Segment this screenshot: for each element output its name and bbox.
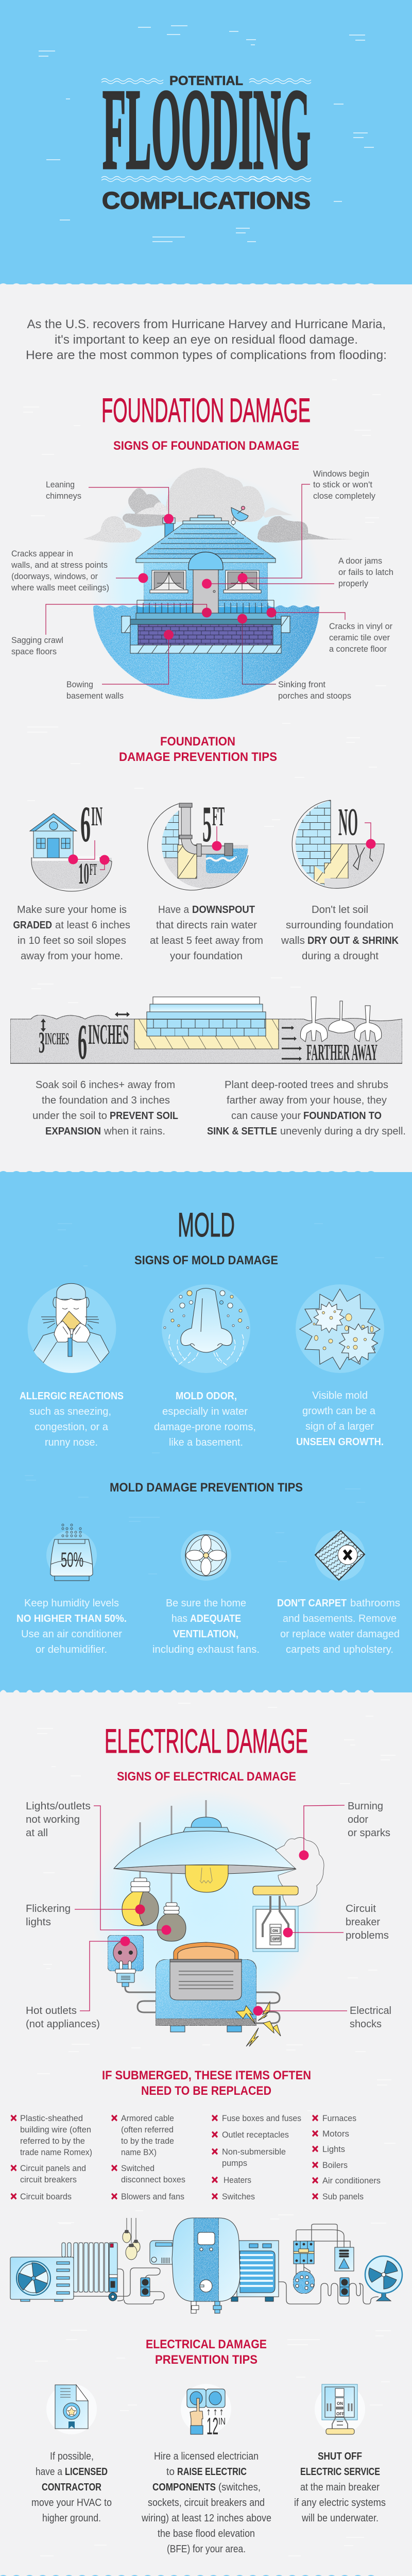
cords: [140, 1800, 206, 1903]
callout: flickering lights: lights: [26, 1917, 51, 1928]
tree roots: [300, 997, 382, 1042]
callout: flickering lights: Flickering: [26, 1903, 71, 1914]
flickering bulb: [122, 1878, 159, 1926]
text: shut off: ELECTRIC SERVICE: [300, 2466, 380, 2478]
icon: raised outlets: [181, 2384, 231, 2439]
text: allergic reactions: runny nose.: [45, 1437, 98, 1448]
list column 1: building wire (often: [20, 2125, 91, 2134]
tip text: graded: [13, 904, 130, 962]
heading: if submerged: NEED TO BE REPLACED: [141, 2084, 271, 2098]
list column 1: trade name Romex): [20, 2147, 92, 2157]
toaster: [156, 1942, 256, 2032]
callout: bowing walls: Bowing: [66, 680, 93, 689]
list column 2: Armored cable: [121, 2113, 174, 2123]
text: carpet: [277, 1598, 400, 1655]
list column 4: Air conditioners: [322, 2176, 381, 2185]
text: contractor: [31, 2451, 112, 2524]
text: shut off: SHUT OFF: [318, 2451, 362, 2462]
electrical diagram: ON: [272, 1929, 278, 1933]
list column 4: Furnaces: [322, 2113, 356, 2123]
callout: leaning chimneys: chimneys: [46, 491, 81, 501]
intro text: [26, 317, 387, 362]
icon: dehumidifier: 50%: [61, 1549, 83, 1571]
heading: mold prevention tips: MOLD DAMAGE PREVENTION TIPS: [110, 1481, 303, 1495]
hero title: [101, 65, 311, 214]
text: ventilation: VENTILATION,: [173, 1629, 238, 1640]
porch railing: [137, 600, 274, 613]
house diagram: [83, 468, 353, 703]
callout: cracks in walls: (doorways, windows, or: [11, 571, 98, 581]
tip text: graded: GRADED: [13, 920, 52, 931]
tip text: soak soil: the foundation and 3 inches: [42, 1095, 170, 1106]
tip text: graded: Make sure your home is: [17, 904, 127, 916]
text: humidity: Use an air conditioner: [21, 1629, 122, 1640]
tip icon: graded soil: [29, 807, 112, 891]
wall outlet and plug: [108, 1935, 280, 2023]
text: humidity: Keep humidity levels: [24, 1598, 119, 1609]
icon: dehumidifier: [46, 1524, 97, 1581]
callout: cracks in walls: [11, 549, 148, 592]
callout: electrical shocks: [253, 2005, 391, 2030]
list column 3: [212, 2113, 301, 2201]
heading: foundation prevention tips: DAMAGE PREVENTION TIPS: [119, 750, 277, 764]
callout: lights not working: Lights/outlets: [26, 1801, 91, 1812]
callout: burning odor: or sparks: [348, 1827, 390, 1839]
callout: door jams: [202, 556, 393, 588]
roof: [136, 515, 276, 563]
text: carpet: or replace water damaged: [280, 1629, 400, 1640]
list column 4: Motors: [322, 2129, 349, 2139]
callout: cracks in walls: where walls meet ceilings): [11, 583, 109, 592]
desk fan: [365, 2256, 402, 2301]
subheading: signs of mold damage: SIGNS OF MOLD DAMAGE: [134, 1253, 278, 1267]
callout: circuit breaker problems: Circuit: [346, 1903, 376, 1914]
air conditioner: [10, 2257, 74, 2301]
tip icon: downspout: [148, 795, 249, 891]
tip text: soil shrink: DRY OUT & SHRINK: [307, 935, 399, 946]
tip text: soil shrink: [281, 904, 399, 962]
text: ventilation: ADEQUATE: [190, 1613, 241, 1624]
tip text: downspout: that directs rain water: [156, 920, 257, 931]
callout: cracks in walls: Cracks appear in: [11, 549, 73, 558]
dead bulb: [157, 1903, 186, 1941]
text: raise components: COMPONENTS: [152, 2482, 216, 2493]
list column 1: referred to by the: [20, 2136, 85, 2146]
radiator: [62, 2243, 117, 2301]
callout: sinking porches: porches and stoops: [278, 691, 351, 701]
icon: sneezing person: [28, 1283, 116, 1381]
appliance illustration row: [10, 2218, 402, 2313]
flood water bowl: [93, 605, 319, 699]
callout: windows stick: close completely: [313, 491, 375, 501]
smoke: [276, 1837, 324, 1914]
callout: lights not working: at all: [26, 1827, 48, 1839]
list column 2: (often referred: [121, 2125, 174, 2134]
soil cross-section diagram: 6: [78, 1014, 87, 1070]
callout: hot outlets: Hot outlets: [26, 2005, 77, 2016]
stacked foundation: [147, 997, 266, 1036]
wall socket right: [340, 2278, 349, 2296]
text: carpet: DON'T CARPET: [277, 1598, 347, 1609]
callout: sagging floors: space floors: [11, 647, 57, 656]
text: shut off: will be underwater.: [301, 2513, 379, 2524]
callout: sinking porches: [237, 614, 351, 701]
tip icon: graded soil: 6: [80, 795, 91, 853]
callout: door jams: properly: [338, 579, 368, 588]
callout: circuit breaker problems: breaker: [346, 1917, 380, 1928]
text: ventilation: including exhaust fans.: [152, 1644, 260, 1655]
walls: [144, 563, 268, 606]
text: raise components: Hire a licensed electrician: [154, 2451, 259, 2462]
text: mold odor: especially in water: [162, 1406, 248, 1417]
arrows: [43, 1014, 301, 1059]
intro text: Here are the most common types of complications from flooding:: [26, 348, 387, 362]
tip text: soil shrink: walls: [281, 935, 305, 946]
heading: foundation prevention tips: [119, 735, 277, 764]
list column 4: Lights: [322, 2144, 345, 2154]
callout: cracks in walls: walls, and at stress points: [11, 560, 108, 570]
callout: door jams: A door jams: [338, 556, 382, 566]
list column 4: Sub panels: [322, 2192, 364, 2201]
intro text: it's important to keep an eye on residual flood damage.: [55, 333, 358, 347]
tip icon: graded soil: 10: [78, 857, 89, 890]
title: COMPLICATIONS: COMPLICATIONS: [102, 187, 311, 214]
callout: burning odor: [299, 1801, 390, 1860]
callout: lights not working: [26, 1801, 171, 1935]
tip text: graded: away from your home.: [21, 951, 123, 962]
tip icon: downspout: FT: [212, 802, 225, 832]
text: visible mold: growth can be a: [302, 1405, 376, 1417]
heading: if submerged: IF SUBMERGED, THESE ITEMS OFTEN: [102, 2069, 311, 2082]
list column 2: Switched: [121, 2163, 154, 2173]
heading: if submerged: [102, 2069, 311, 2098]
text: contractor: have a: [36, 2466, 63, 2478]
text: contractor: move your HVAC to: [31, 2497, 112, 2509]
callout: sagging floors: [11, 604, 212, 656]
subheading: signs of foundation damage: SIGNS OF FOUNDATION DAMAGE: [113, 439, 299, 453]
tip text: soak soil: when it rains.: [104, 1126, 165, 1137]
list column 3: Non-submersible: [222, 2147, 286, 2157]
tip text: plant trees: FOUNDATION TO: [303, 1110, 382, 1122]
tip text: soil shrink: during a drought: [302, 951, 379, 962]
callout: vinyl cracks: ceramic tile over: [329, 633, 390, 642]
callout: leaning chimneys: Leaning: [46, 480, 75, 489]
list column 3: Switches: [222, 2192, 255, 2201]
chimney: [163, 518, 175, 538]
text: contractor: CONTRACTOR: [42, 2482, 101, 2493]
callout: windows stick: [238, 469, 375, 583]
callout: burning odor: odor: [348, 1814, 368, 1825]
breaker switches: [294, 2241, 314, 2264]
clouds: [83, 468, 353, 543]
tip text: graded: in 10 feet so soil slopes: [18, 935, 126, 946]
tip text: downspout: [150, 904, 263, 962]
tip text: soak soil: [32, 1079, 178, 1137]
text: allergic reactions: congestion, or a: [35, 1421, 109, 1433]
callout: hot outlets: (not appliances): [26, 2019, 100, 2030]
front door: [193, 570, 218, 613]
text: mold odor: [154, 1391, 256, 1448]
hanging bulbs: [123, 2218, 140, 2260]
motor: [231, 2241, 279, 2301]
text: shut off: at the main breaker: [300, 2482, 380, 2493]
text: humidity: or dehumidifier.: [36, 1644, 107, 1655]
text: humidity: [16, 1598, 127, 1655]
text: contractor: If possible,: [50, 2451, 94, 2462]
text: carpet: bathrooms: [350, 1598, 400, 1609]
tip icon: graded soil: FT: [90, 860, 97, 878]
text: visible mold: Visible mold: [312, 1390, 368, 1401]
callout: bowing walls: [66, 630, 174, 701]
heading: electrical prevention tips: [146, 2337, 267, 2367]
wall unit: [150, 2241, 176, 2264]
list column 2: [111, 2113, 185, 2201]
text: carpet: carpets and upholstery.: [286, 1644, 393, 1655]
glow: [90, 471, 322, 703]
round meter: [293, 2271, 315, 2294]
list column 2: disconnect boxes: [121, 2175, 185, 2184]
title wave ornaments: [101, 78, 311, 181]
text: humidity: NO HIGHER THAN 50%.: [16, 1613, 127, 1624]
callout: vinyl cracks: Cracks in vinyl or: [329, 621, 392, 631]
heading: mold: MOLD: [178, 1206, 235, 1244]
tip text: plant trees: SINK & SETTLE: [207, 1126, 277, 1137]
list column 1: Plastic-sheathed: [20, 2113, 83, 2123]
subheading: signs of electrical damage: SIGNS OF ELECTRICAL DAMAGE: [117, 1770, 296, 1784]
soil cross-section diagram: INCHES: [88, 1019, 129, 1050]
list column 2: to by the trade: [121, 2136, 174, 2146]
electrical diagram: [90, 1790, 324, 2046]
hanging lamp: [114, 1817, 299, 1892]
soil cross-section diagram: [10, 997, 402, 1070]
icon: shut off breaker: ON: [337, 2401, 343, 2406]
satellite dish: [231, 506, 248, 526]
callout: burning odor: Burning: [348, 1801, 383, 1812]
text: ventilation: Be sure the home: [166, 1598, 246, 1609]
icon: contractor license: [46, 2384, 97, 2434]
heading: electrical prevention tips: ELECTRICAL DAMAGE: [146, 2337, 267, 2351]
tip text: soil shrink: surrounding foundation: [286, 920, 393, 931]
text: carpet: and basements. Remove: [283, 1613, 397, 1624]
text: raise components: (BFE) for your area.: [167, 2544, 246, 2555]
callout: hot outlets: [26, 1936, 130, 2030]
tip text: downspout: DOWNSPOUT: [192, 904, 255, 916]
text: mold odor: MOLD ODOR,: [176, 1391, 237, 1402]
title: POTENTIAL: POTENTIAL: [169, 74, 243, 88]
callout: door jams: or fails to latch: [338, 567, 393, 577]
text: raise components: to: [166, 2466, 175, 2478]
icon: shut off breaker: OFF: [336, 2412, 345, 2416]
tip text: plant trees: [207, 1079, 406, 1137]
icon: shut off breaker: [315, 2384, 365, 2434]
tip text: plant trees: can cause your: [231, 1110, 301, 1122]
tip text: graded: at least 6 inches: [55, 920, 130, 931]
glow: [90, 1790, 322, 2022]
icon: nose: [162, 1284, 250, 1373]
wall socket left: [141, 2278, 150, 2296]
text: raise components: RAISE ELECTRIC: [177, 2466, 247, 2478]
callout: circuit breaker problems: [283, 1903, 389, 1941]
text: contractor: LICENSED: [65, 2466, 108, 2478]
list column 1: circuit breakers: [20, 2175, 77, 2184]
list column 1: [10, 2113, 92, 2201]
tip icon: soil shrink: [292, 799, 386, 891]
tip text: soil shrink: Don't let soil: [312, 904, 368, 916]
tip icon: graded soil: IN: [91, 802, 102, 832]
text: raise components: sockets, circuit breakers and: [148, 2497, 265, 2509]
tip text: soak soil: under the soil to: [32, 1110, 107, 1122]
windows: [150, 570, 261, 593]
soil cross-section diagram: 3: [39, 1026, 45, 1059]
list column 4: Boilers: [322, 2160, 348, 2170]
tip text: soak soil: PREVENT SOIL: [110, 1110, 178, 1122]
text: raise components: (switches,: [218, 2482, 261, 2493]
list column 3: Outlet receptacles: [222, 2130, 289, 2140]
icon: mold spores: [296, 1284, 384, 1373]
list column 1: Circuit panels and: [20, 2163, 86, 2173]
callout: leaning chimneys: [46, 480, 174, 523]
text: ventilation: [152, 1598, 260, 1655]
list column 1: Circuit boards: [20, 2192, 72, 2201]
tip text: plant trees: farther away from your house, they: [227, 1095, 387, 1106]
callout: electrical shocks: shocks: [350, 2019, 382, 2030]
foundation: [122, 613, 290, 653]
list column 3: Fuse boxes and fuses: [222, 2113, 301, 2123]
lightning bolts: [236, 2002, 281, 2046]
icon: no carpet: [315, 1530, 365, 1581]
door arch: [188, 552, 223, 570]
text: allergic reactions: [20, 1391, 124, 1448]
tip text: downspout: Have a: [158, 904, 190, 916]
callout: lights not working: not working: [26, 1814, 80, 1825]
text: allergic reactions: ALLERGIC REACTIONS: [20, 1391, 124, 1402]
callout: windows stick: Windows begin: [313, 469, 369, 479]
callout: sagging floors: Sagging crawl: [11, 635, 63, 645]
list column 3: Heaters: [224, 2175, 251, 2185]
list column 2: name BX): [121, 2147, 157, 2157]
icon: ventilation fan: [181, 1530, 231, 1581]
text: ventilation: has: [171, 1613, 187, 1624]
tip text: soak soil: EXPANSION: [45, 1126, 101, 1137]
fuse box: [335, 2247, 354, 2271]
callout: vinyl cracks: a concrete floor: [329, 644, 387, 654]
callout: bowing walls: basement walls: [66, 691, 124, 701]
tip text: plant trees: Plant deep-rooted trees and shrubs: [225, 1079, 388, 1091]
text: shut off: if any electric systems: [294, 2497, 386, 2509]
text: visible mold: sign of a larger: [305, 1421, 374, 1432]
soil cross-section diagram: INCHES: [45, 1030, 69, 1048]
list column 3: pumps: [222, 2158, 247, 2168]
circuit breaker: [253, 1886, 298, 1952]
tip text: soak soil: Soak soil 6 inches+ away from: [36, 1079, 175, 1091]
icon: raised outlets: 12: [207, 2413, 218, 2439]
callout: windows stick: to stick or won't: [313, 480, 372, 489]
soil strip: [10, 1015, 402, 1063]
callout: flickering lights: [26, 1903, 145, 1928]
text: contractor: higher ground.: [42, 2513, 101, 2524]
tip icon: soil shrink: NO: [338, 801, 358, 844]
callout: electrical shocks: Electrical: [350, 2005, 391, 2016]
heading: electrical prevention tips: PREVENTION TIPS: [155, 2353, 258, 2367]
text: raise components: [141, 2451, 271, 2555]
icon: raised outlets: IN: [218, 2416, 226, 2427]
text: raise components: wiring) at least 12 inches above: [141, 2513, 271, 2524]
water heater: [172, 2218, 240, 2313]
list column 2: Blowers and fans: [121, 2192, 184, 2201]
heading: foundation prevention tips: FOUNDATION: [160, 735, 235, 749]
text: visible mold: UNSEEN GROWTH.: [296, 1436, 384, 1448]
tip text: downspout: your foundation: [170, 951, 243, 962]
callout: sinking porches: Sinking front: [278, 680, 325, 689]
tip text: plant trees: unevenly during a dry spell.: [280, 1126, 406, 1137]
text: mold odor: damage-prone rooms,: [154, 1421, 256, 1433]
electrical diagram: OFF: [272, 1938, 280, 1941]
tip icon: downspout: 5: [202, 795, 212, 853]
intro text: As the U.S. recovers from Hurricane Harvey and Hurricane Maria,: [27, 317, 386, 331]
callout: circuit breaker problems: problems: [346, 1930, 389, 1941]
wires: [52, 2224, 379, 2304]
text: mold odor: like a basement.: [169, 1437, 243, 1448]
callout: vinyl cracks: [267, 608, 392, 654]
text: visible mold: [296, 1390, 384, 1448]
list column 4: [312, 2113, 381, 2201]
text: raise components: the base flood elevation: [158, 2528, 255, 2539]
text: shut off: [294, 2451, 386, 2524]
yellow footing: [134, 1019, 279, 1049]
tip text: downspout: at least 5 feet away from: [150, 935, 263, 946]
text: allergic reactions: such as sneezing,: [29, 1406, 111, 1417]
